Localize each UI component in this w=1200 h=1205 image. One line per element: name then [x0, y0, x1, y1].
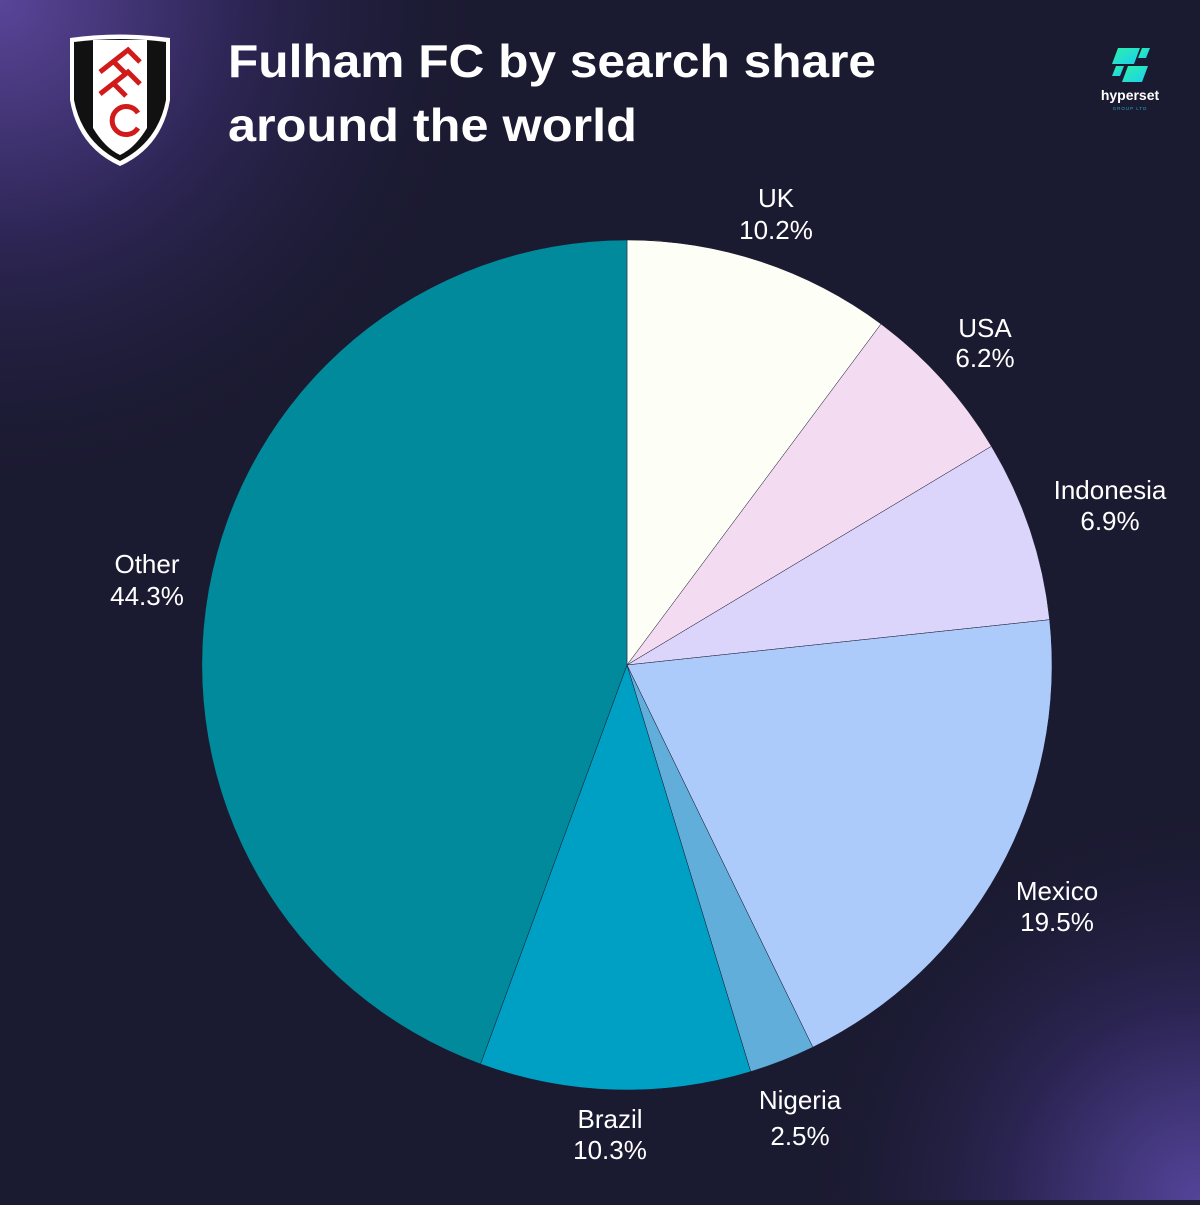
logo: Fulham FC crest: [70, 34, 170, 166]
labels: 44.3%: [110, 581, 184, 611]
labels: 19.5%: [1020, 907, 1094, 937]
title: [228, 35, 876, 151]
labels: Brazil: [577, 1104, 643, 1134]
labels: 2.5%: [770, 1121, 830, 1151]
labels: Mexico: [1016, 876, 1098, 906]
slice: Mexico: [627, 620, 1052, 1047]
labels: 6.2%: [955, 343, 1015, 373]
labels: Indonesia: [1054, 475, 1167, 505]
logo: hyperset: hyperset: [1101, 87, 1160, 103]
slice: Other: [202, 240, 627, 1064]
labels: UK: [758, 183, 795, 213]
labels: 10.2%: [739, 215, 813, 245]
labels: USA: [958, 313, 1012, 343]
title: Fulham FC by search share: [228, 35, 876, 87]
slice: USA: [627, 324, 991, 665]
labels: Nigeria: [759, 1085, 842, 1115]
pie chart: [202, 240, 1052, 1090]
title: around the world: [228, 99, 637, 151]
slice: Nigeria: [627, 665, 813, 1072]
slice: Brazil: [480, 665, 751, 1090]
logo: hyperset: [1101, 48, 1160, 111]
logo: hyperset: GROUP LTD: [1113, 106, 1147, 111]
labels: 6.9%: [1080, 506, 1140, 536]
labels: [110, 183, 1167, 1165]
labels: Other: [114, 549, 180, 579]
slice: Indonesia: [627, 446, 1050, 665]
slice: UK: [627, 240, 881, 665]
labels: 10.3%: [573, 1135, 647, 1165]
